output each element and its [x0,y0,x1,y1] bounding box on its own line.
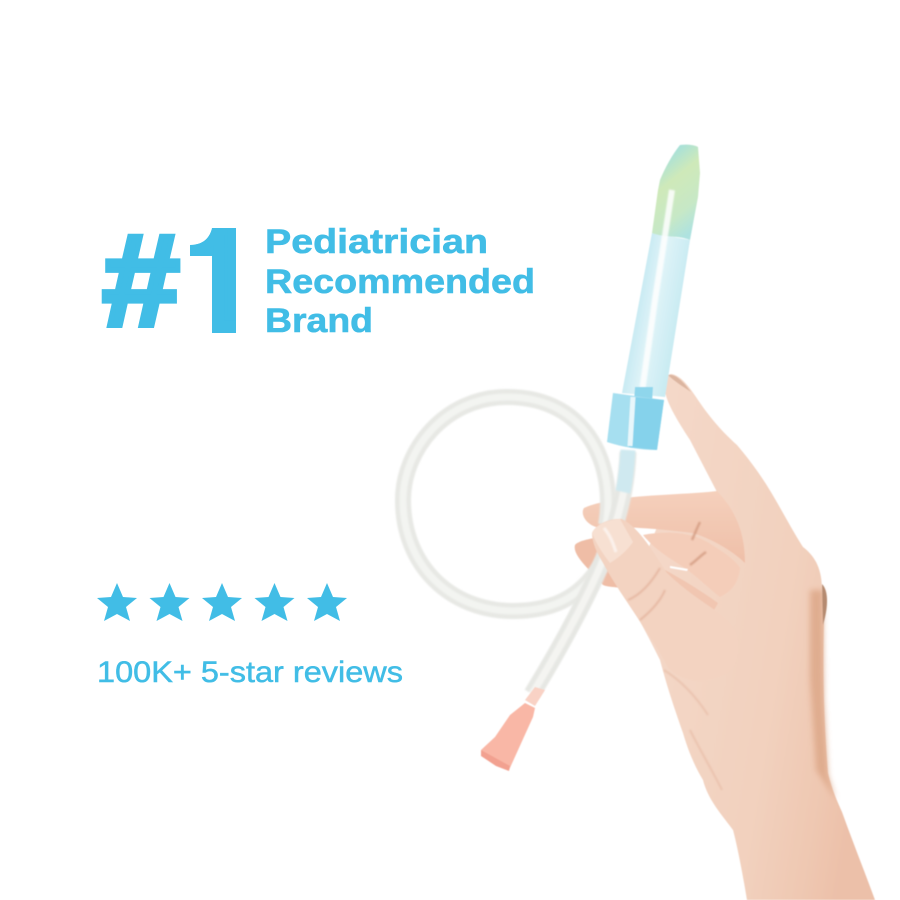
back fingers [575,491,745,619]
tip neck [525,687,545,706]
heading: Pediatrician Recommended Brand [265,223,535,340]
star 3 [202,583,242,621]
finger creases [690,522,706,565]
wrist edge shading [810,590,836,800]
product photo: hand holding aspirator [403,145,875,900]
aspirator tube loop [403,397,608,611]
star 5 [307,583,347,621]
white gap between fingers [670,566,688,571]
creases on palm [664,670,722,790]
hand back and wrist [627,374,875,900]
collar plug [634,387,653,402]
finger: lower [660,570,718,619]
dark knuckle edge [822,584,827,625]
heading: #1: 1 [186,201,246,364]
star 2 [150,583,190,621]
thumbnail highlight [604,528,616,552]
star 4 [254,583,294,621]
aspirator stem tube [532,450,628,694]
finger: middle [643,533,740,597]
heading: Pediatrician Recommended Brand: Pediatrician [265,223,488,261]
heading: #1: # [102,206,180,354]
aspirator pink tip [481,687,545,771]
syringe tip [652,145,700,240]
syringe collar [607,393,664,450]
tip cone [481,703,535,770]
thumb knuckle creases [628,568,665,620]
thumbnail [592,519,633,563]
heading: #1 [102,228,236,333]
heading: Pediatrician Recommended Brand: Brand [265,302,373,340]
finger: lower left tip [575,536,625,590]
star 1 [97,583,137,621]
heading: Pediatrician Recommended Brand: Recommended [265,263,535,301]
thumb [592,519,739,681]
infographic canvas [97,144,876,900]
finger: upper [583,491,745,563]
fingernail on pointing finger [668,375,691,392]
collar highlight [630,397,633,446]
collar inner darker [629,397,664,450]
syringe barrel [622,233,690,397]
tip rim [481,750,510,771]
syringe highlight [642,190,672,392]
five star rating [97,583,347,621]
aspirator syringe body [607,145,700,450]
review count text: 100K+ 5-star reviews [97,656,403,689]
